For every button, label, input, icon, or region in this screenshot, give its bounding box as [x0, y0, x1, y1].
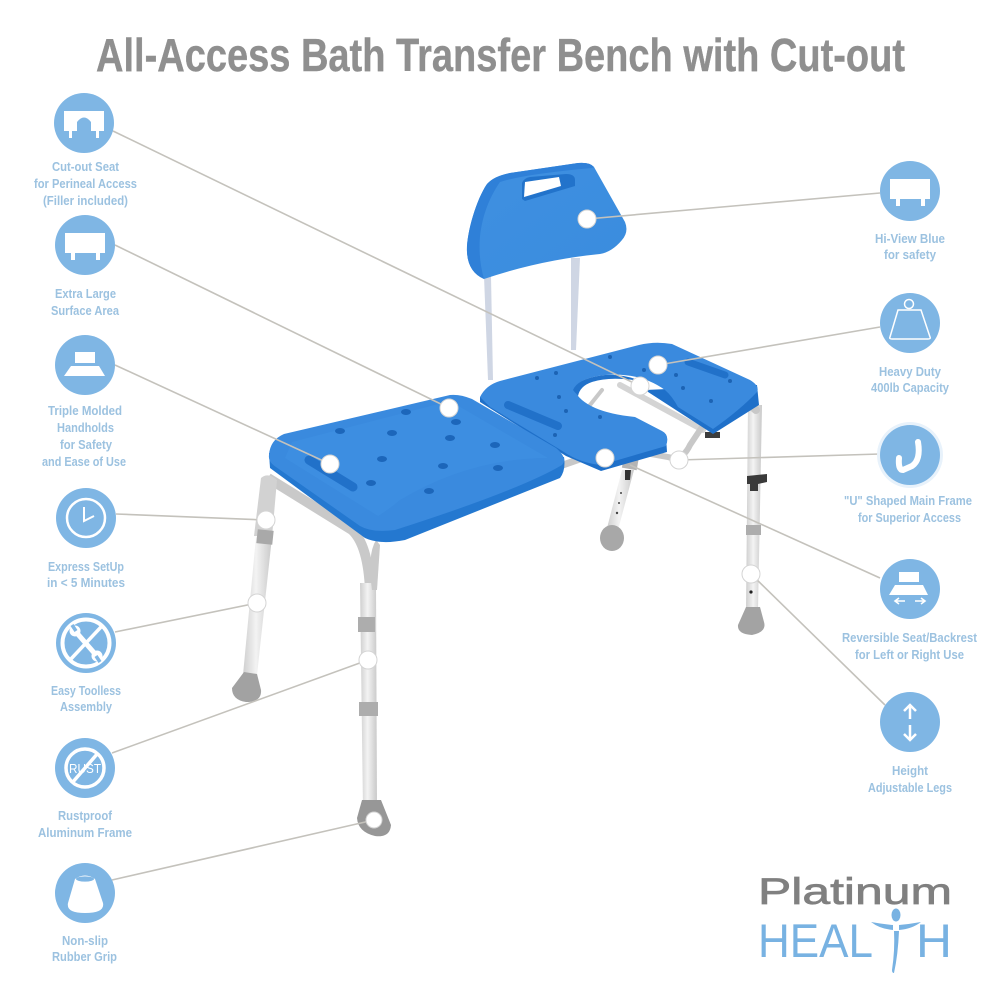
feature: reversible seat: Reversible Seat/Backrest — [842, 630, 978, 645]
left seat handhold — [309, 460, 353, 487]
feature: rubber grip — [52, 863, 117, 964]
feature: hi-view blue — [875, 161, 945, 262]
right seat rear handhold — [688, 362, 725, 375]
feature: hi-view blue: for safety — [884, 247, 937, 262]
feature: heavy duty: Heavy Duty — [879, 364, 942, 379]
feature: cut-out seat: for Perineal Access — [34, 176, 137, 191]
front legs and frame — [232, 475, 391, 836]
right seat section — [480, 343, 759, 471]
rear legs — [600, 405, 767, 635]
feature: extra large surface: Surface Area — [51, 303, 120, 318]
logo figure — [871, 908, 921, 973]
feature: U-shaped frame — [844, 422, 972, 525]
feature: reversible seat — [842, 559, 978, 662]
right seat drain holes — [535, 355, 732, 437]
feature: toolless assembly — [51, 613, 121, 714]
callout markers — [248, 210, 760, 828]
logo: Platinum Health: HEAL — [758, 914, 873, 967]
bench product photo — [232, 163, 767, 836]
under-seat frame — [560, 385, 756, 466]
left seat section — [269, 395, 564, 542]
logo: Platinum Health: Platinum — [758, 871, 952, 912]
feature: toolless assembly: Assembly — [60, 699, 113, 714]
feature: hi-view blue: Hi-View Blue — [875, 231, 945, 246]
feature: toolless assembly: Easy Toolless — [51, 683, 121, 698]
feature: cut-out seat: (Filler included) — [43, 193, 128, 208]
feature: reversible seat: for Left or Right Use — [855, 647, 964, 662]
feature: rubber grip: Non-slip — [62, 933, 108, 948]
feature: U-shaped frame: for Superior Access — [858, 510, 961, 525]
feature: express setup — [47, 488, 125, 590]
feature: cut-out seat — [34, 93, 137, 208]
feature: U-shaped frame: "U" Shaped Main Frame — [844, 493, 972, 508]
backrest handle — [522, 174, 575, 201]
logo: Platinum Health: H — [916, 914, 952, 967]
logo: Platinum Health — [758, 871, 952, 973]
backrest struts — [484, 258, 580, 380]
feature: height adjustable — [868, 692, 952, 795]
feature: handholds: Handholds — [57, 420, 114, 435]
feature: rustproof — [38, 738, 132, 840]
feature: rustproof: Rustproof — [58, 808, 113, 823]
feature: handholds — [42, 335, 126, 469]
feature: rubber grip: Rubber Grip — [52, 949, 117, 964]
feature: heavy duty: 400lb Capacity — [871, 380, 950, 395]
feature: rustproof: RUST — [69, 761, 101, 776]
feature: extra large surface — [51, 215, 120, 318]
feature: rustproof: Aluminum Frame — [38, 825, 132, 840]
feature: express setup: Express SetUp — [48, 559, 124, 574]
feature: cut-out seat: Cut-out Seat — [52, 159, 120, 174]
right seat front handhold — [508, 405, 558, 426]
feature: extra large surface: Extra Large — [55, 286, 116, 301]
feature: height adjustable: Adjustable Legs — [868, 780, 952, 795]
feature: handholds: Triple Molded — [48, 403, 122, 418]
callout leader lines — [112, 131, 885, 880]
feature: handholds: and Ease of Use — [42, 454, 126, 469]
feature: height adjustable: Height — [892, 763, 929, 778]
feature: handholds: for Safety — [60, 437, 113, 452]
feature: heavy duty — [871, 293, 950, 395]
left seat drain holes — [335, 409, 503, 494]
feature: express setup: in < 5 Minutes — [47, 575, 125, 590]
backrest — [467, 163, 626, 279]
